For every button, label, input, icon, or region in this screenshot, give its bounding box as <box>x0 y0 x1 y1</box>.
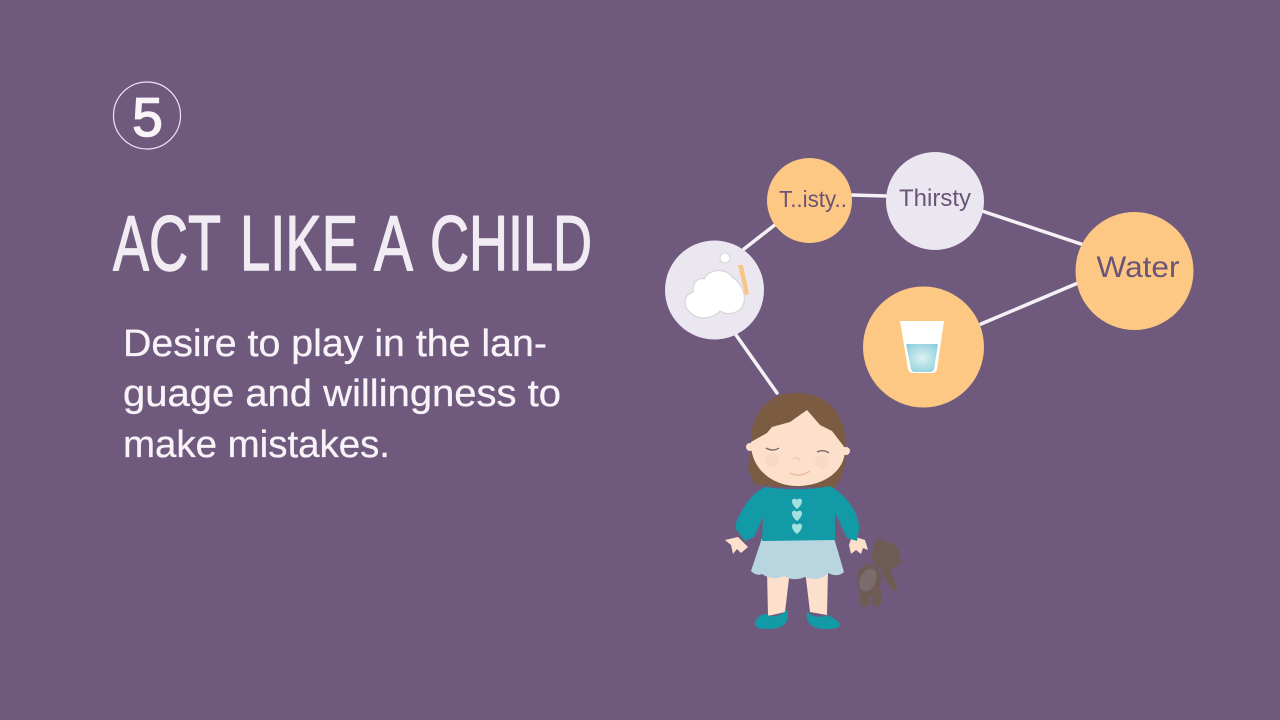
node: Thirsty: Thirsty <box>899 185 971 212</box>
teddy bear <box>856 539 901 607</box>
eyes <box>766 448 779 450</box>
step number badge <box>114 82 180 149</box>
shoes <box>755 610 788 629</box>
node: popcorn <box>665 240 764 340</box>
legs <box>767 570 790 616</box>
hands <box>725 537 748 554</box>
node: Water <box>1076 212 1194 330</box>
description text: guage and willingness to <box>123 373 561 415</box>
face <box>751 410 845 486</box>
node: T..isty..: T..isty.. <box>779 186 847 212</box>
sweater <box>736 486 859 541</box>
child figure <box>725 393 868 629</box>
node: Thirsty <box>886 152 984 250</box>
nose and smile <box>793 458 800 460</box>
hair back <box>748 393 846 490</box>
skirt <box>751 538 844 579</box>
ears <box>746 443 754 451</box>
connector lines <box>736 195 1084 393</box>
description text: Desire to play in the lan- <box>123 323 547 365</box>
heart buttons <box>792 499 802 534</box>
title: CHILD <box>430 199 592 287</box>
description text <box>123 323 561 466</box>
title: A <box>374 199 413 287</box>
title <box>113 199 592 287</box>
title: ACT <box>113 199 221 287</box>
icon: glass <box>900 321 944 373</box>
icon: popcorn <box>685 253 749 318</box>
description text: make mistakes. <box>123 424 390 466</box>
node: T..isty.. <box>767 158 852 243</box>
cheeks <box>765 453 779 467</box>
step number badge: 5 <box>132 86 163 148</box>
node: Water: Water <box>1096 251 1180 284</box>
title: LIKE <box>240 199 358 287</box>
node: glass of water <box>863 286 984 408</box>
